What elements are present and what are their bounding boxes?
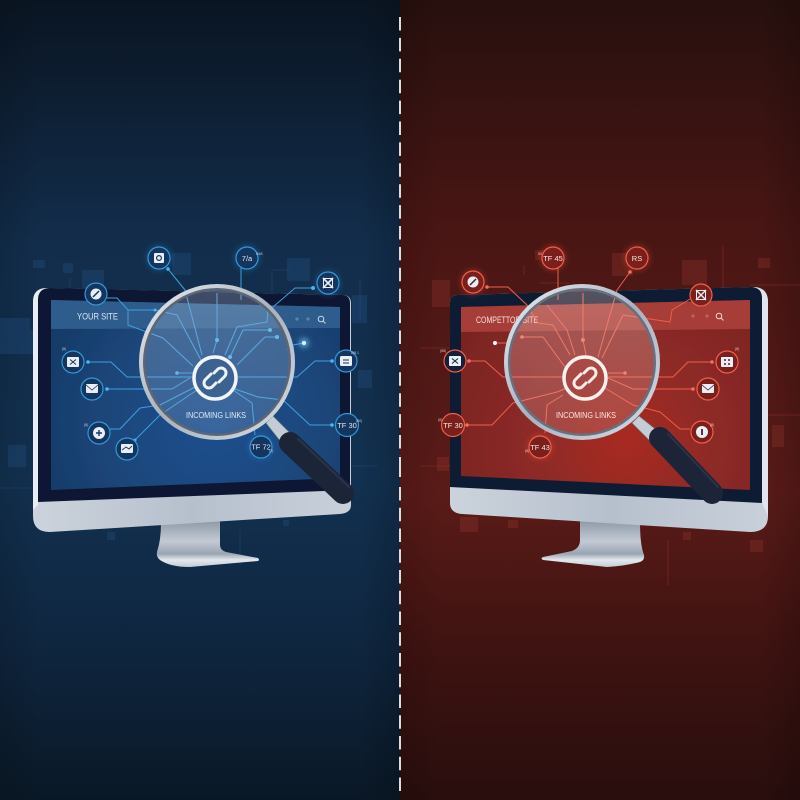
node: refresh icon (335, 350, 359, 372)
lens outer rim (141, 286, 293, 438)
site label: YOUR SITE (77, 312, 118, 322)
magnifier: your site (141, 286, 349, 493)
link badge (564, 357, 606, 399)
monitor body (450, 287, 768, 532)
node: compass icon (460, 269, 486, 295)
node: TF 30: TF 30 (337, 421, 357, 430)
node: TF 30: (8) (438, 418, 442, 422)
node: compass icon (85, 283, 107, 305)
lens outer rim (506, 286, 658, 438)
magnifier: competitor site (506, 286, 718, 493)
node: TF 45: TF 45 (543, 254, 563, 263)
node: score 7/a (234, 245, 263, 271)
node: TF 43: TF 43 (530, 443, 550, 452)
link network: your site (86, 267, 334, 442)
magnifier handle (290, 439, 349, 493)
search icon (295, 316, 326, 324)
node: grid icon: (8) (735, 347, 739, 351)
body highlight (33, 288, 47, 510)
link badge (194, 357, 236, 399)
link network: competitor site (465, 268, 714, 433)
node: TF 43: (8) (525, 449, 529, 453)
node: TF 72: (2) (269, 449, 273, 453)
divider: dashed centre line (399, 17, 401, 792)
site header bar (461, 300, 750, 332)
node: plus icon (84, 422, 110, 444)
monitor bezel (38, 288, 350, 502)
node: shuffle icon (62, 347, 84, 373)
screen (461, 300, 750, 490)
node: microphone icon (691, 421, 714, 443)
node: plus icon: (8) (84, 423, 88, 427)
node: mail icon (697, 378, 719, 400)
lens glass (145, 290, 289, 434)
node: TF 72 (248, 434, 274, 460)
lens glass (510, 290, 654, 434)
node: RS (624, 245, 650, 271)
magnifier handle collar (266, 416, 290, 442)
node: TF 30 (336, 414, 362, 436)
node: refresh icon: 8(8.1 (351, 351, 359, 355)
lens inner rim (509, 289, 655, 435)
node: shuffle icon: (8) (62, 347, 66, 351)
monitor stand (542, 520, 644, 567)
node: network icon (690, 284, 712, 306)
monitor body (33, 288, 351, 532)
node: TF 30 (438, 414, 464, 436)
node: RS: RS (632, 254, 642, 263)
panel: your site background (0, 0, 400, 800)
node: grid icon (716, 347, 739, 373)
node: TF 45 (538, 245, 566, 271)
lens caption: INCOMING LINKS (556, 410, 616, 420)
node: score 7/a: 7/a (242, 254, 253, 263)
panel: competitor site background (400, 0, 800, 800)
node: TF 30: (80) (356, 419, 362, 423)
node: microphone icon: (8) (710, 423, 714, 427)
magnifier handle (660, 434, 718, 493)
node: shuffle icon (440, 349, 466, 372)
link nodes: your site (62, 245, 362, 460)
node: chart icon (116, 438, 138, 460)
site label: COMPETTOR SITE (476, 315, 538, 325)
monitor: your site (33, 288, 351, 567)
magnifier handle collar (632, 416, 659, 441)
node: network icon (315, 270, 341, 296)
lens inner rim (144, 289, 290, 435)
link nodes: competitor site (438, 245, 739, 460)
body highlight (752, 287, 768, 516)
node: shuffle icon: (58) (440, 349, 446, 353)
node: gear icon (146, 245, 172, 271)
icon: chain link (574, 368, 596, 388)
node: TF 43 (525, 434, 553, 460)
icon: chain link (204, 368, 226, 388)
node: TF 72: TF 72 (251, 442, 271, 452)
search icon (691, 313, 724, 320)
monitor: competitor site (450, 287, 768, 567)
screen (51, 300, 340, 490)
lens caption: INCOMING LINKS (186, 410, 246, 420)
node: TF 30: TF 30 (443, 421, 463, 430)
node: TF 45: 50 (538, 252, 542, 256)
node: mail icon (81, 378, 103, 400)
node: score 7/a: 8/k5 (256, 252, 263, 256)
monitor bezel (450, 287, 762, 503)
site header bar (51, 300, 340, 329)
monitor stand (157, 520, 259, 567)
